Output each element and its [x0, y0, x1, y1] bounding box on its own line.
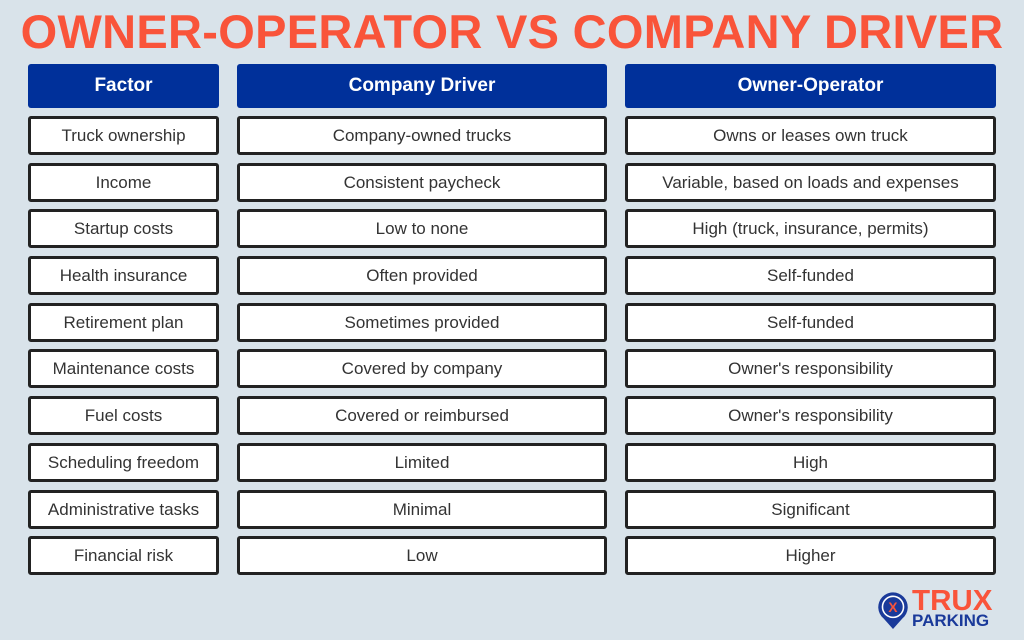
- logo text: TRUX: [912, 585, 993, 617]
- row 5: Retirement plan: [63, 313, 184, 332]
- row 5: Sometimes provided: [345, 313, 499, 332]
- row 6: Owner's responsibility: [728, 359, 893, 378]
- row 2: [28, 163, 996, 202]
- row 10: Low: [406, 546, 438, 565]
- row 2: Variable, based on loads and expenses: [662, 173, 959, 192]
- row 8: Scheduling freedom: [48, 453, 199, 472]
- header: Company Driver: Company Driver: [349, 75, 495, 96]
- row 3: Startup costs: [74, 219, 173, 238]
- row 8: High: [793, 453, 828, 472]
- icon: pin: X: [888, 600, 898, 615]
- row 4: Health insurance: [60, 266, 187, 285]
- row 7: [28, 396, 996, 435]
- row 7: Owner's responsibility: [728, 406, 893, 425]
- header: Owner-Operator: Owner-Operator: [738, 75, 883, 96]
- header: Owner-Operator: [625, 64, 996, 108]
- row 2: Consistent paycheck: [344, 173, 500, 192]
- row 2: Income: [96, 173, 151, 192]
- logo: [878, 585, 993, 630]
- row 4: Self-funded: [767, 266, 854, 285]
- row 1: Company-owned trucks: [333, 126, 511, 145]
- header: Factor: Factor: [94, 75, 153, 96]
- row 9: Significant: [771, 500, 850, 519]
- row 6: Maintenance costs: [53, 359, 194, 378]
- icon: pin: [878, 592, 908, 629]
- row 9: Minimal: [393, 500, 451, 519]
- row 4: [28, 256, 996, 295]
- row 7: Covered or reimbursed: [335, 406, 509, 425]
- row 1: Truck ownership: [61, 126, 186, 145]
- row 3: Low to none: [376, 219, 468, 238]
- row 6: Covered by company: [342, 359, 502, 378]
- row 10: Financial risk: [74, 546, 173, 565]
- row 9: [28, 490, 996, 529]
- row 3: High (truck, insurance, permits): [692, 219, 929, 238]
- logo: PARKING: [912, 611, 989, 630]
- row 9: Administrative tasks: [48, 500, 199, 519]
- row 10: Higher: [785, 546, 836, 565]
- row 3: [28, 209, 996, 248]
- row 8: Limited: [395, 453, 449, 472]
- row 10: [28, 536, 996, 575]
- row 6: [28, 349, 996, 388]
- row 1: Owns or leases own truck: [713, 126, 908, 145]
- header: Company Driver: [237, 64, 607, 108]
- row 8: [28, 443, 996, 482]
- row 7: Fuel costs: [85, 406, 162, 425]
- title: OWNER-OPERATOR VS COMPANY DRIVER: [21, 5, 1003, 58]
- row 4: Often provided: [366, 266, 478, 285]
- row 1: [28, 116, 996, 155]
- row 5: Self-funded: [767, 313, 854, 332]
- row 5: [28, 303, 996, 342]
- header: Factor: [28, 64, 219, 108]
